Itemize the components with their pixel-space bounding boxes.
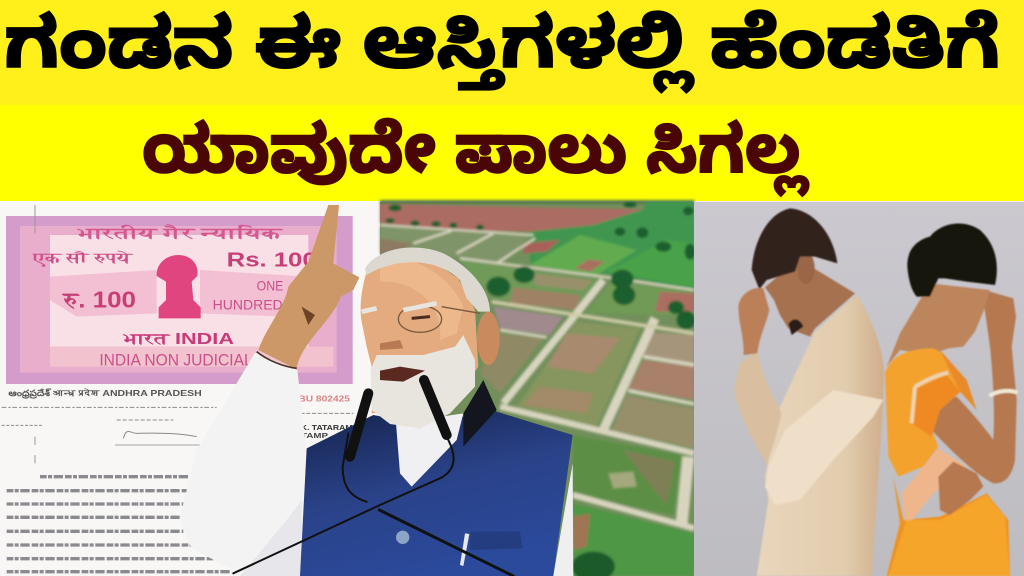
stamp: HUNDRED [213, 296, 283, 312]
bangle [989, 391, 1017, 396]
serial number: BU 802425 [298, 394, 350, 404]
field: dark strip at top [380, 200, 694, 204]
document body text [7, 477, 237, 572]
plots lower [573, 435, 682, 515]
top title band [0, 0, 1024, 105]
plots upper row [380, 227, 530, 263]
roads [380, 225, 694, 528]
right sleeve [553, 463, 573, 576]
stamp: Rs. 100 [227, 249, 317, 272]
stamp: भारत INDIA [123, 331, 234, 348]
panel: couple back to back [694, 202, 1024, 576]
state name line: ఆంధ్రప్రదేశ్ आन्ध्र प्रदेश ANDHRA PRADESH [8, 387, 202, 399]
heading line one: ಗಂಡನ ಈ ಆಸ್ತಿಗಳಲ್ಲಿ ಹೆಂಡತಿಗೆ [4, 4, 1000, 93]
handwriting and signature [2, 205, 353, 463]
woman saree [887, 477, 1010, 576]
glasses and eye [398, 306, 480, 332]
jacket [300, 411, 573, 576]
pocket and pen [470, 532, 523, 550]
woman [885, 223, 1017, 576]
man kurta [757, 295, 884, 576]
panel: stamp paper document [0, 202, 380, 576]
white kurta arm [179, 353, 307, 576]
man neck and face [765, 260, 855, 337]
icon: national emblem [157, 255, 201, 318]
woman lower hand [938, 462, 983, 515]
man forearm fold [765, 390, 883, 505]
woman arm and fist [932, 292, 1017, 483]
microphones and stands [233, 380, 513, 576]
hand pointing up [258, 205, 359, 369]
white hair [365, 248, 490, 312]
mouth [380, 367, 425, 382]
ear [477, 312, 500, 365]
heading line two: ಯಾವುದೇ ಪಾಲು ಸಿಗಲ್ಲ [142, 112, 809, 197]
panel: aerial view of land plots [380, 200, 695, 576]
woman neck and face [887, 283, 990, 367]
man hand [738, 288, 769, 355]
stamp: ONE [257, 278, 283, 294]
woman orange blouse [885, 348, 960, 477]
second title band [0, 105, 1024, 201]
stamp: एक सौ रुपये [32, 250, 133, 268]
panel: stamp paper document: STAMP [295, 431, 328, 440]
stamp: INDIA NON JUDICIAL [99, 351, 253, 370]
white shirt and collar [396, 413, 463, 487]
woman hair [907, 223, 997, 297]
stamp: रु. 100 [61, 286, 136, 312]
field: red soil top [380, 204, 643, 232]
trees [385, 202, 695, 329]
field: bright green top right [530, 202, 694, 290]
man [734, 208, 884, 576]
vendor name: V.V.K. TATARAM [286, 423, 353, 432]
face [361, 255, 478, 413]
beard [371, 335, 475, 428]
stamp: भारतीय गैर न्यायिक [77, 224, 284, 242]
panel: speaker in front of backgrounds [179, 205, 573, 576]
man hair [752, 208, 837, 289]
stamp [6, 216, 353, 384]
man arm sleeve [734, 350, 782, 465]
plots middle [493, 307, 563, 335]
